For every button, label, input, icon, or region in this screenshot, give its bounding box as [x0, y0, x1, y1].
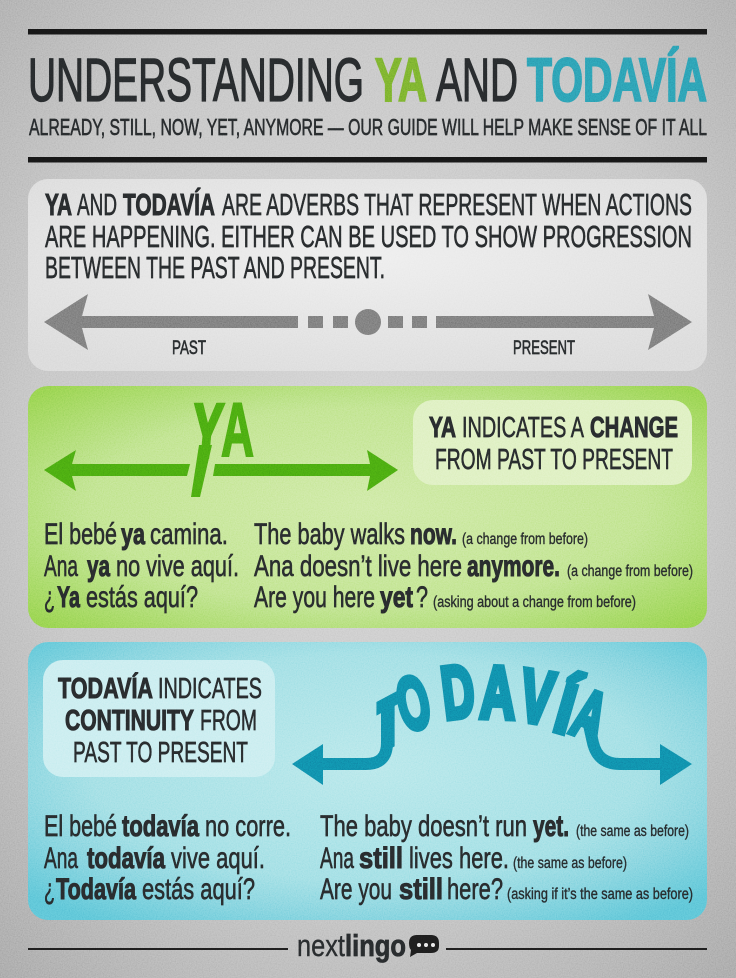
todavia english examples: Are you — [320, 873, 392, 906]
todavia arched arrow and wordmark: O — [389, 659, 438, 747]
ya english examples: (asking about a change from before) — [433, 594, 636, 611]
todavia spanish examples — [44, 810, 291, 906]
ya spanish examples: ya — [87, 550, 110, 583]
footer logo: next — [297, 928, 345, 963]
todavia english examples — [320, 810, 693, 906]
intro text — [45, 187, 692, 285]
todavia arched arrow and wordmark: A — [563, 674, 617, 756]
todavia english examples: Ana — [320, 842, 354, 875]
ya callout: YA — [429, 412, 456, 444]
todavia arched arrow and wordmark: D — [437, 649, 479, 735]
todavia spanish examples: todavía — [87, 842, 165, 875]
ya spanish examples: Ya — [57, 581, 80, 614]
todavia spanish examples: vive aquí. — [171, 842, 265, 875]
todavia arched arrow and wordmark: A — [479, 651, 517, 735]
ya english examples: now. — [410, 518, 457, 551]
icon: speech bubble — [409, 935, 439, 957]
todavia spanish examples: Todavía — [56, 873, 136, 906]
ya english examples: Are you here — [254, 581, 375, 614]
panel: introduction — [28, 179, 707, 371]
ya callout: INDICATES A — [462, 412, 584, 444]
todavia callout: TODAVÍA — [58, 671, 153, 705]
intro text: BETWEEN THE PAST AND PRESENT. — [45, 251, 385, 285]
todavia spanish examples: todavía — [122, 810, 199, 843]
ya spanish examples: camina. — [150, 518, 228, 551]
ya english examples — [254, 518, 693, 614]
ya spanish examples: El bebé — [44, 518, 117, 551]
todavia callout: FROM — [200, 705, 257, 737]
todavia callout: PAST TO PRESENT — [73, 737, 248, 769]
todavia arched arrow and wordmark — [292, 649, 692, 785]
intro text: YA — [45, 188, 72, 222]
ya callout — [413, 400, 692, 485]
panel: ya — [28, 386, 707, 628]
footer logo — [28, 928, 707, 963]
header — [28, 29, 707, 162]
ya arrow and wordmark — [44, 388, 398, 497]
ya english examples: The baby walks — [254, 518, 405, 551]
ya english examples: (a change from before) — [462, 531, 588, 548]
todavia callout: INDICATES — [158, 673, 262, 705]
ya english examples: Ana doesn’t live here — [254, 550, 462, 583]
todavia english examples: (the same as before) — [513, 855, 627, 872]
todavia arched arrow and wordmark: Í — [547, 668, 586, 749]
intro text: TODAVÍA — [123, 187, 215, 222]
todavia callout — [43, 660, 275, 777]
ya arrow and wordmark: A — [221, 388, 254, 473]
ya spanish examples: estás aquí? — [86, 581, 198, 614]
todavia arched arrow and wordmark: T — [378, 676, 402, 768]
todavia english examples: (asking if it’s the same as before) — [507, 886, 693, 903]
ya arrow and wordmark: Y — [189, 390, 226, 474]
label: present: PRESENT — [513, 338, 575, 359]
todavia arched arrow and wordmark: V — [514, 654, 560, 741]
ya english examples: yet — [380, 581, 413, 614]
todavia english examples: (the same as before) — [576, 823, 689, 840]
ya english examples: (a change from before) — [567, 563, 693, 580]
todavia spanish examples: ¿ — [44, 873, 55, 906]
title: AND — [436, 46, 518, 115]
todavia spanish examples: no corre. — [205, 810, 291, 843]
todavia english examples: here? — [447, 873, 503, 906]
todavia english examples: The baby doesn’t run — [320, 810, 527, 843]
ya spanish examples: no vive aquí. — [116, 550, 239, 583]
label: past: PAST — [172, 338, 206, 359]
todavia english examples: yet. — [533, 810, 569, 843]
ya callout: CHANGE — [590, 412, 678, 444]
todavia english examples: lives here. — [409, 842, 509, 875]
todavia english examples: still — [399, 873, 443, 906]
title: YA — [375, 46, 427, 115]
ya spanish examples: Ana — [44, 550, 78, 583]
ya spanish examples: ¿ — [44, 581, 55, 614]
timeline arrow — [44, 294, 692, 350]
ya spanish examples — [44, 518, 239, 614]
footer logo: lingo — [345, 928, 406, 963]
ya english examples: anymore. — [467, 550, 560, 583]
ya spanish examples: ya — [121, 518, 145, 551]
todavia callout: CONTINUITY — [65, 705, 194, 737]
panel: todavia — [28, 642, 707, 920]
todavia spanish examples: El bebé — [44, 810, 117, 843]
intro text: AND — [77, 188, 117, 222]
todavia english examples: still — [359, 842, 403, 875]
ya english examples: ? — [416, 581, 428, 614]
title: UNDERSTANDING — [28, 46, 364, 115]
todavia spanish examples: estás aquí? — [142, 873, 255, 906]
todavia spanish examples: Ana — [44, 842, 78, 875]
